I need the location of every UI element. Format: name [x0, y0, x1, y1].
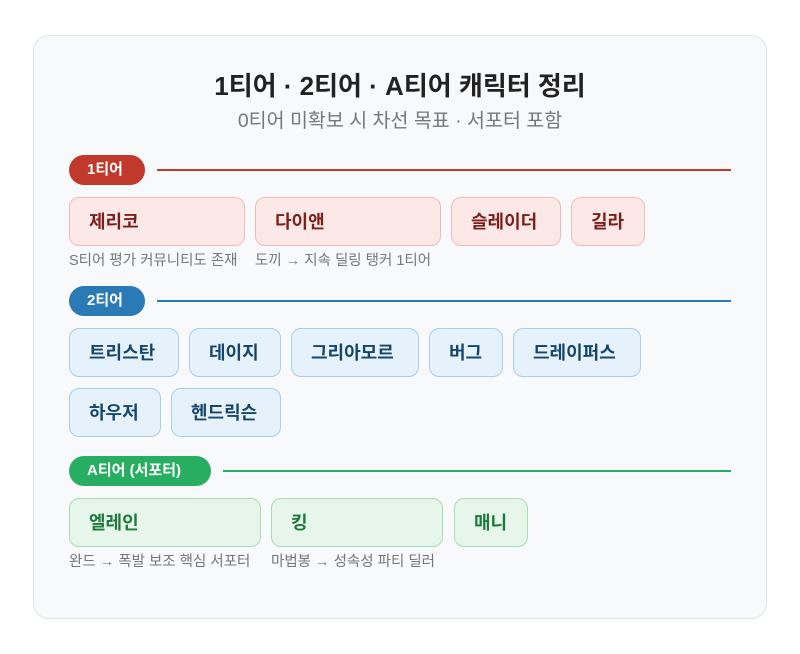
card: 다이앤 — [255, 197, 441, 246]
note: 제리코: S티어 평가 커뮤니티도 존재 — [69, 253, 238, 269]
note: 다이앤: 도끼 → 지속 딜링 탱커 1티어 — [255, 253, 431, 269]
card: 길라: 길라 — [591, 212, 624, 232]
card: 헨드릭슨: 헨드릭슨 — [191, 403, 257, 423]
card: 엘레인: 엘레인 — [89, 513, 139, 533]
card: 다이앤: 다이앤 — [275, 212, 325, 232]
badge: A티어 — [69, 456, 211, 486]
subtitle: 0티어 미확보 시 차선 목표 · 서포터 포함 — [238, 110, 562, 132]
card: 매니 — [454, 498, 528, 547]
card: 버그 — [429, 328, 503, 377]
card: 제리코: 제리코 — [89, 212, 139, 232]
badge: 1티어: 1티어 — [87, 161, 123, 178]
note: 킹: 마법봉 → 성속성 파티 딜러 — [271, 554, 435, 570]
card: 슬레이더: 슬레이더 — [471, 212, 537, 232]
card: 헨드릭슨 — [171, 388, 281, 437]
card: 드레이퍼스: 드레이퍼스 — [533, 343, 616, 363]
card: 버그: 버그 — [449, 343, 482, 363]
card: 킹: 킹 — [291, 513, 308, 533]
card: 킹 — [271, 498, 443, 547]
card: 길라 — [571, 197, 645, 246]
title: 1티어 · 2티어 · A티어 캐릭터 정리 — [214, 71, 586, 101]
card: 트리스탄: 트리스탄 — [89, 343, 155, 363]
card: 슬레이더 — [451, 197, 561, 246]
card: 그리아모르 — [291, 328, 419, 377]
card: 드레이퍼스 — [513, 328, 641, 377]
badge: 2티어 — [69, 286, 145, 316]
badge: 1티어 — [69, 155, 145, 185]
card: 데이지: 데이지 — [209, 343, 259, 363]
card: 데이지 — [189, 328, 281, 377]
card: 제리코 — [69, 197, 245, 246]
card: 하우저: 하우저 — [89, 403, 139, 423]
badge: 2티어: 2티어 — [87, 292, 123, 309]
card: 매니: 매니 — [474, 513, 507, 533]
card: 엘레인 — [69, 498, 261, 547]
card: 그리아모르: 그리아모르 — [311, 343, 394, 363]
note: 엘레인: 완드 → 폭발 보조 핵심 서포터 — [69, 554, 250, 570]
card: 하우저 — [69, 388, 161, 437]
card: 트리스탄 — [69, 328, 179, 377]
badge: A티어: A티어 (서포터) — [87, 462, 181, 479]
